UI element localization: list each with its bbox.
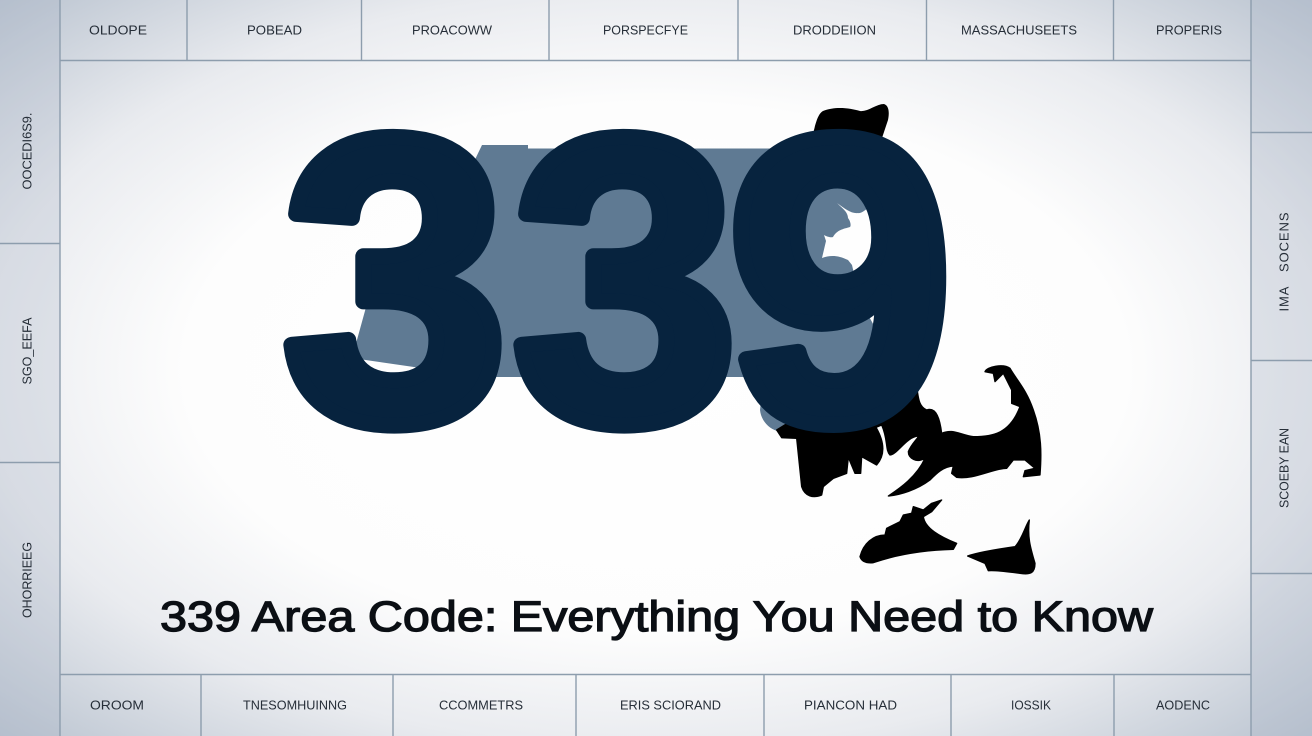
label: CCOMMETRS: CCOMMETRS — [439, 698, 523, 712]
big number: 339: 3 — [282, 54, 508, 508]
big number: 339: 3 — [512, 54, 738, 508]
label: PORSPECFYE: PORSPECFYE — [603, 22, 688, 38]
map: Cape Cod and southeast Massachusetts — [777, 357, 1041, 574]
label: OLDOPE: OLDOPE — [89, 22, 147, 38]
label: MASSACHUSEETS: MASSACHUSEETS — [961, 22, 1077, 38]
label: POBEAD: POBEAD — [247, 22, 302, 38]
label: IMA SOCENS: IMA SOCENS — [1276, 212, 1292, 312]
label: AODENC: AODENC — [1156, 698, 1210, 712]
label: ERIS SCIORAND: ERIS SCIORAND — [620, 698, 721, 712]
label: PROACOWW: PROACOWW — [412, 22, 493, 38]
map: Martha's Vineyard island — [860, 500, 957, 563]
label: SGO_EEFA: SGO_EEFA — [20, 317, 34, 384]
title: 339 Area Code: Everything You Need to Know — [160, 593, 1154, 641]
label: PIANCON HAD: PIANCON HAD — [804, 698, 897, 712]
panel: bottom navigation strip — [90, 698, 1210, 712]
label: OROOM: OROOM — [90, 698, 144, 712]
label: DRODDEIION: DRODDEIION — [793, 22, 876, 38]
panel: right side strip — [1276, 212, 1292, 508]
panel: top navigation strip — [89, 22, 1222, 38]
label: OOCEDI6S9.: OOCEDI6S9. — [20, 112, 34, 190]
panel: left side strip — [20, 112, 34, 618]
label: OHORRIEEG: OHORRIEEG — [20, 542, 34, 618]
map: Nantucket island — [968, 520, 1035, 574]
label: PROPERIS: PROPERIS — [1156, 22, 1222, 38]
label: TNESOMHUINNG: TNESOMHUINNG — [243, 698, 347, 712]
label: SCOEBY EAN: SCOEBY EAN — [1276, 428, 1292, 508]
label: IOSSIK: IOSSIK — [1011, 698, 1051, 712]
map: Massachusetts silhouette, black north section — [810, 104, 889, 150]
big number: 339: 9 — [727, 54, 953, 508]
map: Massachusetts silhouette, mainland blue section — [352, 145, 890, 431]
